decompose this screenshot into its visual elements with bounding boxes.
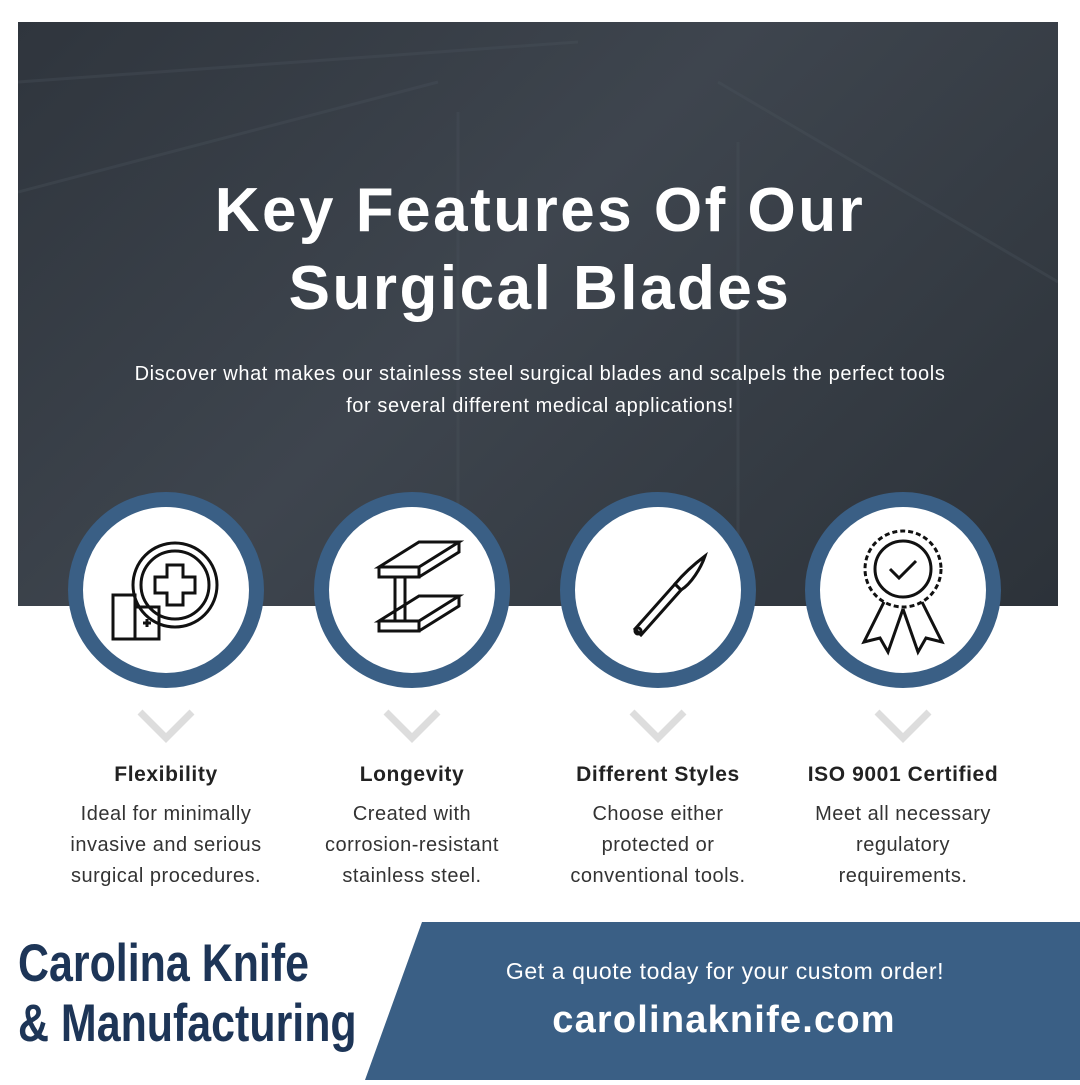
footer banner: Get a quote today for your custom order!	[506, 958, 944, 984]
feature: iso: ISO 9001 Certified	[808, 763, 998, 786]
icon circle: different styles	[560, 492, 756, 688]
feature: flexibility: invasive and serious	[70, 834, 262, 856]
feature: flexibility: surgical procedures.	[71, 865, 261, 887]
feature: different styles: Choose either	[592, 803, 724, 825]
logo text	[18, 934, 357, 1053]
footer banner	[365, 922, 1080, 1080]
logo text: Carolina Knife	[18, 934, 309, 993]
subtitle: Discover what makes our stainless steel surgical blades and scalpels the perfect tools	[135, 363, 945, 385]
feature: longevity: Longevity	[360, 763, 464, 786]
icon circle: flexibility	[68, 492, 264, 688]
title: Key Features Of Our	[215, 176, 865, 245]
feature: flexibility	[70, 763, 262, 887]
subtitle: for several different medical applications!	[346, 395, 734, 417]
footer banner: carolinaknife.com	[552, 999, 896, 1041]
feature: different styles: conventional tools.	[570, 865, 746, 887]
logo text: & Manufacturing	[18, 994, 357, 1053]
feature: iso	[808, 763, 998, 887]
icon circle: iso certified	[805, 492, 1001, 688]
feature: longevity: Created with	[353, 803, 471, 825]
subtitle	[135, 363, 945, 417]
feature: iso: regulatory	[856, 834, 950, 856]
feature: different styles: Different Styles	[576, 763, 740, 786]
feature: flexibility: Ideal for minimally	[81, 803, 251, 825]
feature: iso: requirements.	[839, 865, 967, 887]
title: Surgical Blades	[289, 254, 791, 323]
feature: flexibility: Flexibility	[114, 763, 218, 786]
feature: longevity: corrosion-resistant	[325, 834, 499, 856]
chevrons	[138, 710, 932, 743]
feature: different styles: protected or	[602, 834, 714, 856]
feature: longevity: stainless steel.	[342, 865, 482, 887]
feature: longevity	[325, 763, 499, 887]
hero panel	[18, 22, 1058, 606]
title	[215, 176, 865, 323]
feature: different styles	[570, 763, 746, 887]
icon circle: longevity	[314, 492, 510, 688]
feature: iso: Meet all necessary	[815, 803, 991, 825]
